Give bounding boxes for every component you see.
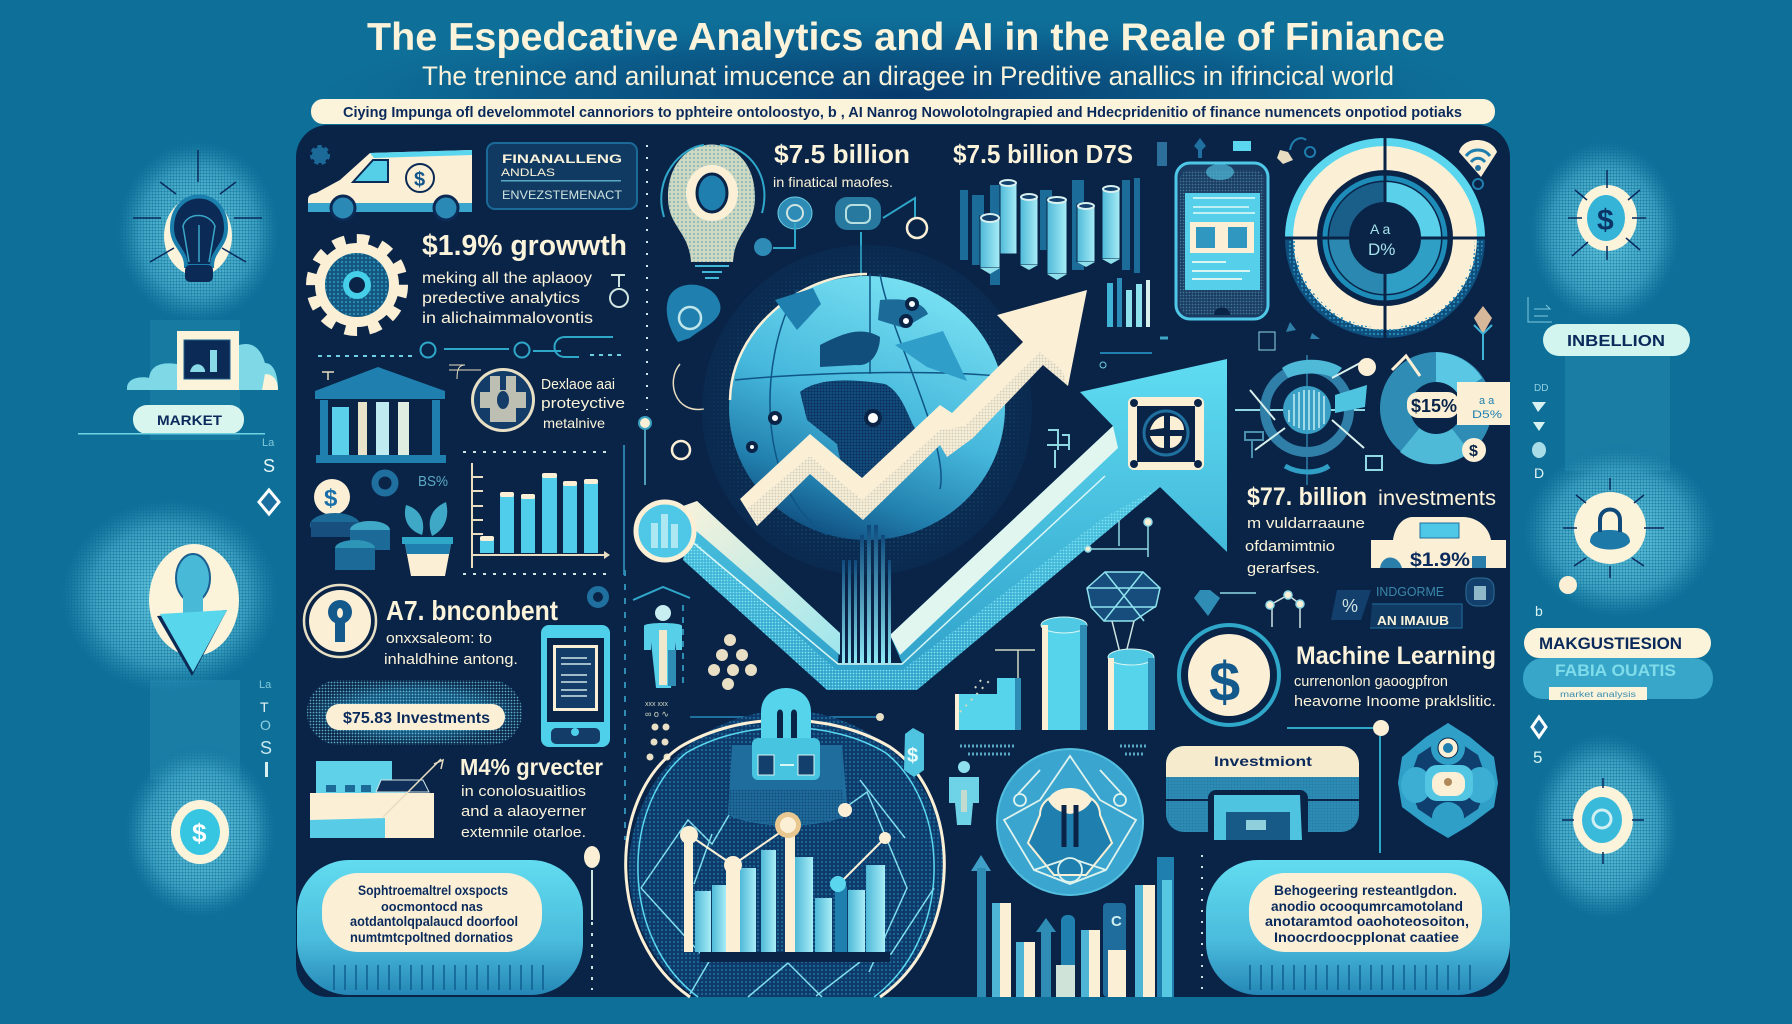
chart: stairs and cylinders [955,617,1155,754]
stat: growth: in alichaimmalovontis [422,310,593,327]
stat: 77 billion investments: m vuldarraaune [1247,516,1365,532]
pill: left note: numtmtcpoltned dornatios [350,929,513,945]
stat: growth: meking all the aplaooy [422,270,592,287]
icon: mesh [1087,572,1160,653]
card: investment: Investmiont [1214,753,1312,769]
card: investment [1166,746,1359,840]
small glyphs: top left [259,437,279,514]
icon: dots grid [645,634,757,760]
stat: bnconbent: onxxsaleom: to [386,631,492,647]
chart: bottom right bars: C [1111,913,1122,930]
icon: medallion [449,365,535,432]
label: makgustiesion pill: MAKGUSTIESION [1539,634,1682,653]
small glyphs: top left: S [263,456,275,476]
icon: folder with arrow [310,759,443,838]
chart: radial gauge [1235,355,1382,485]
icon: pin with swirl [667,285,720,409]
banner [311,99,1495,124]
stat: machine learning: heavorne Inoome praklslitic. [1294,693,1496,710]
icon: dollar halo right [1536,738,1673,914]
note: deploy: metalnive [543,415,605,431]
icon: person small [949,761,979,825]
connector nodes upper right [1085,518,1304,628]
stat: M4%: M4% grvecter [460,754,603,780]
chart: pie with label: D5% [1472,409,1502,421]
chart: pie with label: $ [1469,443,1478,460]
icon: delivery van: $ [414,169,425,191]
stat: machine learning: Machine Learning [1296,642,1496,670]
pill: left note: aotdantolqpalaucd doorfool [350,913,518,929]
small chart glyph [1528,297,1552,322]
icon: ring pin [610,275,628,307]
icon: dollar halo: $ [192,818,207,848]
stat: 7.5 billion: in finatical maofes. [773,174,893,190]
pill: investments: $75.83 Investments [343,710,490,727]
chart: bottom right bars [971,855,1174,997]
icon: bank [315,367,446,463]
icon: small gear 3 [590,589,606,605]
icon: small gear [312,147,328,163]
small glyphs: lower left: La [259,679,272,691]
small bars [1100,278,1152,368]
pill: left note: Sophtroemaltrel oxspocts [358,882,508,898]
small glyphs: upper right: D [1534,465,1544,481]
title: The Espedcative Analytics and AI in the Reale of Finiance [367,16,1445,59]
icon: phone [1176,163,1268,319]
stat: bnconbent: A7. bnconbent [386,595,558,626]
banner: Ciying Impunga ofl develommotel cannoriors to pphteire ontoloostyo, b , AI Nanrog Nowolotolngrapied and Hdecpridenitio of finance numencets onpotiod potiaks [343,104,1462,121]
arrow: cream rising [740,290,1087,526]
callout: percent box: INDGORME [1376,584,1444,599]
stat: 77 billion investments: gerarfses. [1247,561,1320,577]
side icons right [1520,138,1720,922]
stat: machine learning [1294,642,1496,710]
small icons top right [1157,138,1315,166]
finance text box [487,143,637,209]
icon: ornament [1398,723,1498,838]
icon: dollar coin [1179,625,1279,725]
stat: 77 billion investments [1245,483,1496,577]
icon: padlock halo [1528,454,1712,613]
icon: plant [402,502,453,576]
pill: right note: anodio ocooqumrcamotoland [1271,898,1463,914]
stat: growth: $1.9% growwth [422,230,627,262]
finance text box: ENVEZSTEMENACT [502,188,623,202]
icon: dollar coin: $ [1209,650,1240,713]
side icons left [58,138,282,920]
stat: 7.5 billion: $7.5 billion [774,139,910,169]
chart: pie with label [1380,352,1510,464]
callout: percent box [1331,578,1494,628]
small connector chart [1047,430,1069,468]
icon: coin halo [1534,145,1676,471]
note: deploy: Dexlaoe aai [541,376,615,393]
stat: M4%: extemnile otarloe. [461,824,586,841]
stat: bnconbent: inhaldhine antong. [384,652,518,668]
icon: coins: $ [324,485,338,512]
icon: chip on arrow [1128,397,1204,470]
icon: large gear [312,240,402,330]
chart: pie with label: a a [1479,395,1495,407]
small glyph: b: b [1535,603,1543,619]
stat: growth [422,230,627,327]
stat: 7.5 billion D7S: $7.5 billion D7S [953,139,1133,169]
small glyphs: lower left: T [260,699,269,715]
icon: coin halo: $ [1597,204,1614,237]
chart: donut [1285,138,1485,338]
stat: 77 billion investments: investments [1378,487,1496,510]
icon: coins [310,479,390,570]
small node icons [754,197,927,287]
arrow: cyan v-shaped [636,359,1227,690]
stat: M4%: in conolosuaitlios [461,783,586,800]
icon: drop pin [584,846,600,990]
stat: M4%: and a alaoyerner [461,803,586,820]
callout: percent box: % [1342,596,1358,616]
icon: dollar halo [130,754,272,913]
chart: pie with label: $15% [1411,396,1457,416]
small stamp icons [1160,322,1320,350]
pill: right note: Behogeering resteantlgdon. [1274,882,1457,898]
icon: tablet [541,625,610,747]
icon: person halo [66,504,274,780]
stat: 77 billion investments: $77. billion [1247,483,1367,511]
small glyphs: upper right [1532,383,1548,481]
small glyphs: top left: La [262,437,275,449]
chart: left bars [463,452,610,574]
icon: dollar tag [904,728,924,777]
pill: left note: oocmontocd nas [381,899,483,914]
connector node [1287,720,1389,853]
label: market: MARKET [157,412,222,428]
icon: person left [633,587,690,688]
icon: small gear 2 [375,473,395,493]
icon: monitor on cloud [127,331,278,390]
stat: machine learning: currenonlon gaoogpfron [1294,673,1448,690]
note: deploy: proteyctive [541,395,625,412]
globe [702,245,1032,575]
small glyphs: lower left [259,679,272,777]
pill: right note: Inoocrdoocpplonat caatiee [1274,929,1459,945]
icon: pin diamond [1474,306,1492,360]
finance text box: ANDLAS [501,167,555,179]
stat: growth: predective analytics [422,290,580,307]
stat: 7.5 billion [773,139,910,190]
icon: wifi tag [1459,140,1497,189]
stat: 77 billion investments: ofdamimtnio [1245,539,1335,555]
small glyphs: lower right [1532,717,1546,767]
note: deploy [541,376,625,431]
chart: donut: D% [1368,240,1395,259]
icon: dollar tag: $ [907,745,918,767]
dotted divider [624,145,690,840]
subtitle: The trenince and anilunat imucence an diragee in Preditive anallics in ifrincical world [422,61,1394,91]
chart: cylinders [960,178,1140,285]
chart: network globe background [626,711,945,997]
icon: lightbulb halo [120,145,274,440]
stat: bnconbent [384,595,558,668]
connector line [318,337,626,358]
label: makgustiesion pill [1523,628,1713,700]
icon: delivery van [308,150,472,220]
pill: right note [1202,855,1510,995]
icon: padlock on globe [728,688,848,826]
pill: investments [307,680,522,745]
small label: BS% [418,473,448,490]
small glyphs: upper right: DD [1534,383,1548,394]
icon: dots grid: xxx xxx [645,701,668,708]
icon: brain circle [997,749,1143,895]
icon: dots grid: ∞ o ∿ [645,709,669,719]
label: makgustiesion pill: FABIA OUATIS [1555,661,1676,680]
small glyphs: lower right: 5 [1533,748,1542,767]
pill: right note: anotaramtod oaohoteosoiton, [1265,913,1469,929]
callout: percent box: AN IMAIUB [1377,613,1449,628]
pill: left note [297,860,583,995]
label: market [78,405,265,434]
finance text box: FINANALLENG [502,152,622,166]
continents [800,380,919,508]
chart: donut: A a [1370,221,1390,237]
label: inbellion: INBELLION [1567,333,1665,350]
callout: 1.9% box: $1.9% [1410,550,1470,571]
label: makgustiesion pill: market analysis [1560,690,1636,699]
icon: keyhole medallion [304,585,376,657]
label: inbellion [1543,324,1690,356]
callout: 1.9% box [1371,517,1506,571]
icon: lightbulb [661,144,764,278]
main panel [296,125,1510,997]
small glyphs: lower left: O [260,717,271,733]
small glyphs: lower left: S [260,738,272,758]
chart: bars and nodes in globe [680,803,891,962]
stat: M4% [460,754,603,841]
